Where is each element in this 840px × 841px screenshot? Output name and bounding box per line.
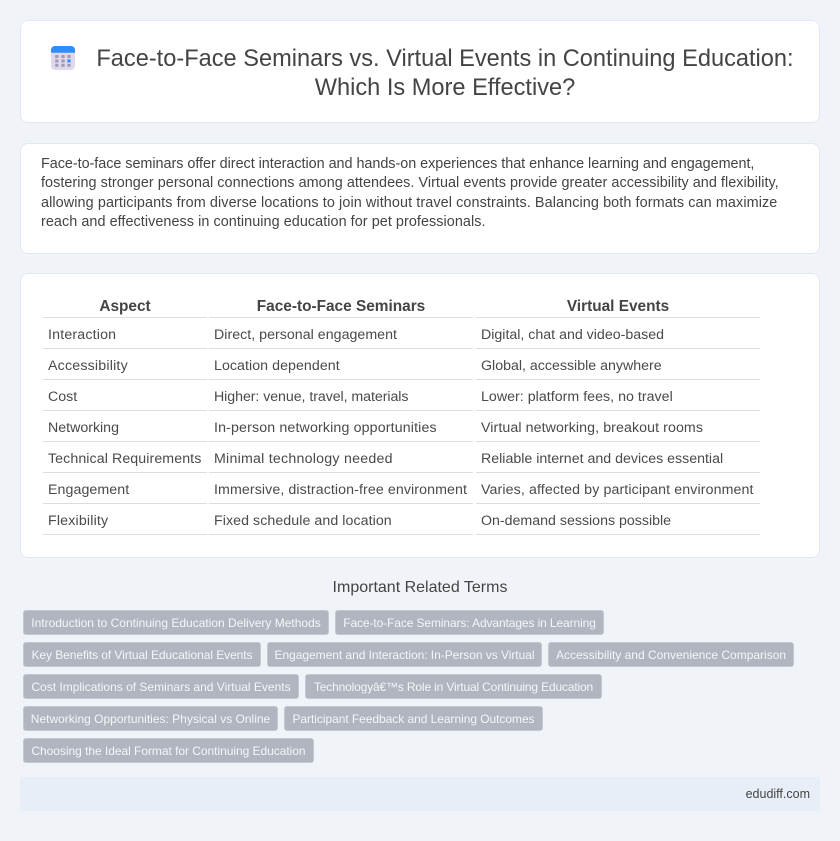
- heading: related terms: Important Related Terms: [333, 579, 507, 596]
- tag: Participant Feedback and Learning Outcomes: [292, 712, 535, 726]
- comparison table: In-person networking opportunities: [214, 420, 437, 436]
- comparison table: Face-to-Face Seminars: [257, 298, 425, 315]
- panel: introduction: [20, 143, 820, 254]
- comparison table: On-demand sessions possible: [481, 513, 671, 529]
- text block: introduction: fostering stronger personal connections among attendees. Virtual events provide greater accessibility and flexibility,: [41, 175, 779, 191]
- comparison table: Networking: [48, 420, 119, 436]
- comparison table: Flexibility: [48, 513, 108, 529]
- comparison table: [43, 298, 760, 535]
- title: [96, 46, 794, 101]
- comparison table: Virtual networking, breakout rooms: [481, 420, 703, 436]
- text block: introduction: [41, 156, 779, 230]
- comparison table: Global, accessible anywhere: [481, 358, 662, 374]
- comparison table: Immersive, distraction-free environment: [214, 482, 467, 498]
- tag: [305, 674, 602, 699]
- comparison table: Technical Requirements: [48, 451, 201, 467]
- comparison table: Cost: [48, 389, 77, 405]
- comparison table: Digital, chat and video-based: [481, 327, 664, 343]
- comparison table: Location dependent: [214, 358, 340, 374]
- tag: Accessibility and Convenience Comparison: [556, 648, 786, 662]
- footer: [20, 777, 820, 811]
- comparison table: Reliable internet and devices essential: [481, 451, 723, 467]
- tag: [267, 642, 542, 667]
- tag: Choosing the Ideal Format for Continuing Education: [31, 744, 306, 758]
- tag: [335, 610, 604, 635]
- tag: [23, 706, 278, 731]
- comparison table: Interaction: [48, 327, 116, 343]
- comparison table: Accessibility: [48, 358, 128, 374]
- tag: [548, 642, 794, 667]
- comparison table: Lower: platform fees, no travel: [481, 389, 673, 405]
- footer: edudiff.com: [746, 787, 810, 801]
- panel: header: [20, 20, 820, 123]
- tag: Technologyâ€™s Role in Virtual Continuing Education: [314, 680, 593, 694]
- comparison table: Minimal technology needed: [214, 451, 393, 467]
- tag: [284, 706, 543, 731]
- comparison table: Varies, affected by participant environment: [481, 482, 754, 498]
- panel: related term tags: [23, 610, 794, 763]
- comparison table: Direct, personal engagement: [214, 327, 397, 343]
- tag: Networking Opportunities: Physical vs Online: [31, 712, 270, 726]
- tag: Cost Implications of Seminars and Virtual Events: [31, 680, 291, 694]
- tag: Key Benefits of Virtual Educational Events: [32, 648, 252, 662]
- tag: Introduction to Continuing Education Delivery Methods: [31, 616, 321, 630]
- tag: [23, 610, 329, 635]
- tag: Engagement and Interaction: In-Person vs Virtual: [274, 648, 534, 662]
- panel: comparison table: [20, 273, 820, 558]
- tag: Face-to-Face Seminars: Advantages in Learning: [343, 616, 596, 630]
- text block: introduction: Face-to-face seminars offer direct interaction and hands-on experiences that enhance learning and engagement,: [41, 156, 754, 172]
- comparison table: Higher: venue, travel, materials: [214, 389, 408, 405]
- icon: calendar: [51, 46, 75, 70]
- text block: introduction: allowing participants from diverse locations to join without travel constraints. Balancing both formats can maximize: [41, 195, 777, 211]
- comparison table: Aspect: [99, 298, 151, 315]
- comparison table: Virtual Events: [567, 298, 669, 315]
- text block: introduction: reach and effectiveness in continuing education for pet professionals.: [41, 214, 486, 230]
- title: Which Is More Effective?: [315, 75, 575, 101]
- comparison table: Fixed schedule and location: [214, 513, 392, 529]
- tag: [23, 674, 299, 699]
- tag: [23, 642, 261, 667]
- tag: [23, 738, 314, 763]
- title: Face-to-Face Seminars vs. Virtual Events in Continuing Education:: [96, 46, 794, 72]
- comparison table: Engagement: [48, 482, 129, 498]
